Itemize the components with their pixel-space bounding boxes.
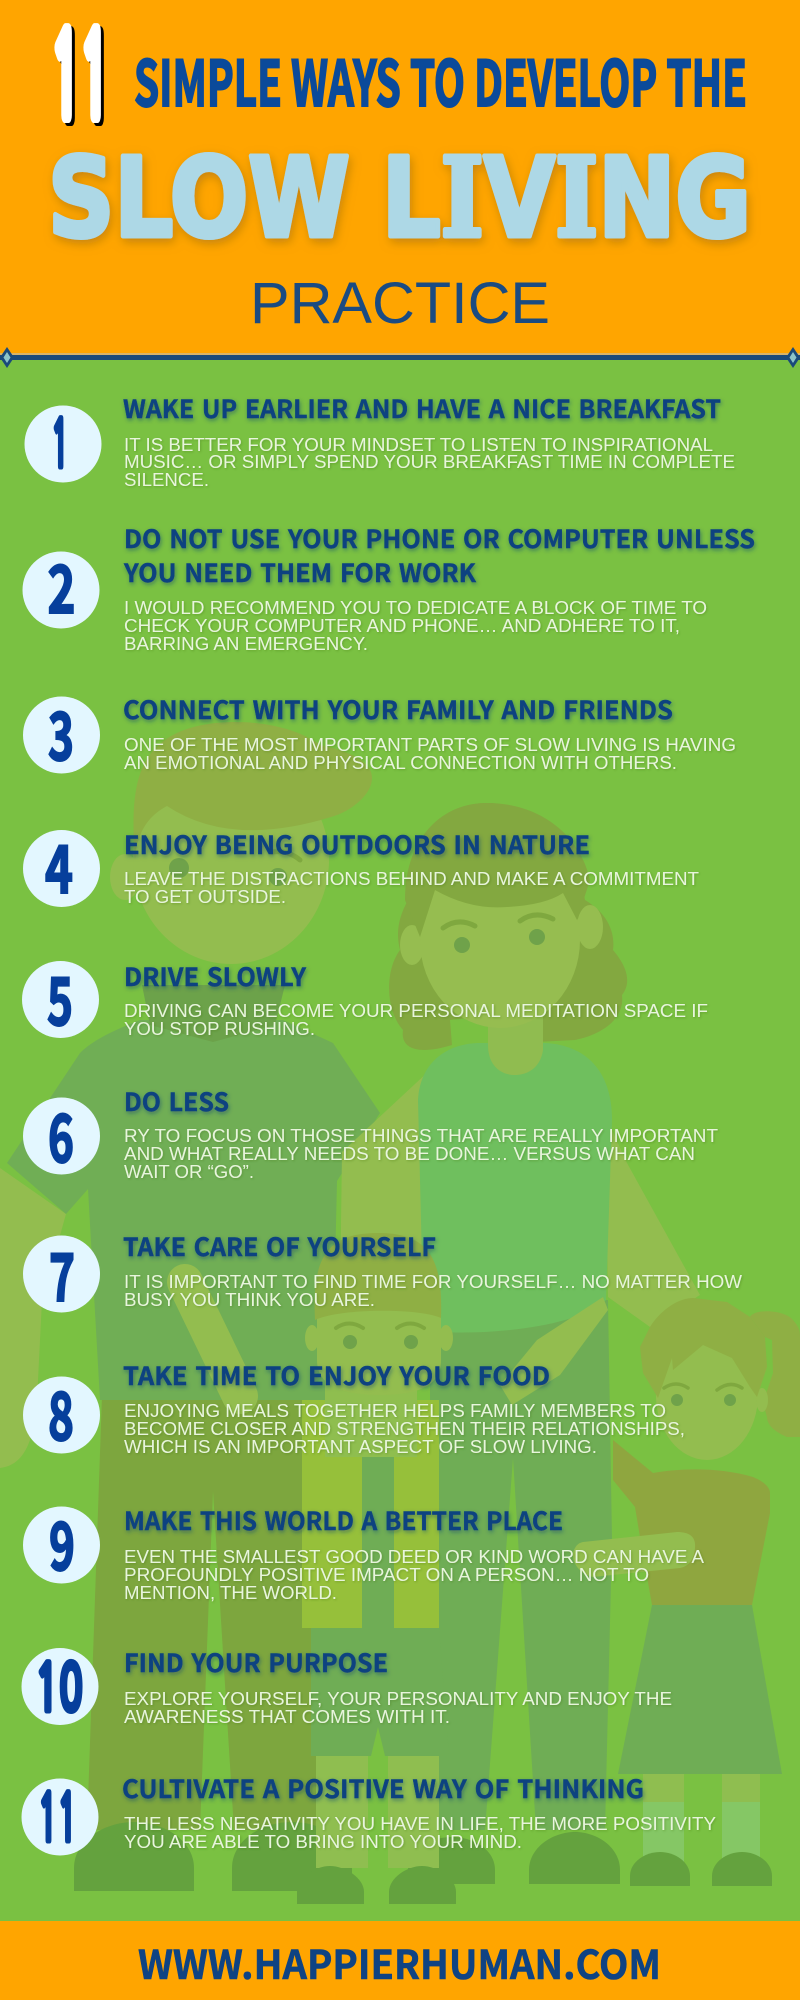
header background <box>0 0 800 358</box>
body 1: IT IS BETTER FOR YOUR MINDSET TO LISTEN TO INSPIRATIONAL <box>124 435 713 455</box>
number badge 6: 6 <box>48 1086 74 1182</box>
body 11 <box>124 1814 716 1852</box>
text: 11 <box>51 20 109 133</box>
item 2 <box>22 520 755 654</box>
body 8 <box>124 1401 685 1457</box>
number badge 2 <box>22 537 100 633</box>
heading 2: YOU NEED THEM FOR WORK <box>123 554 477 590</box>
body 8: ENJOYING MEALS TOGETHER HELPS FAMILY MEMBERS TO <box>124 1401 666 1421</box>
number badge 7 <box>23 1225 100 1321</box>
body 4: TO GET OUTSIDE. <box>124 887 286 907</box>
item 7 <box>23 1225 742 1321</box>
body 9: EVEN THE SMALLEST GOOD DEED OR KIND WORD CAN HAVE A <box>124 1547 704 1567</box>
heading 2 <box>123 520 755 590</box>
body 6: AND WHAT REALLY NEEDS TO BE DONE… VERSUS WHAT CAN <box>124 1144 695 1164</box>
body 11: THE LESS NEGATIVITY YOU HAVE IN LIFE, THE MORE POSITIVITY <box>124 1814 716 1834</box>
heading 9: MAKE THIS WORLD A BETTER PLACE <box>124 1502 563 1538</box>
body 7: BUSY YOU THINK YOU ARE. <box>124 1290 375 1310</box>
header divider with diamonds <box>0 347 800 368</box>
title: practice: PRACTICE <box>250 271 550 336</box>
heading 11: CULTIVATE A POSITIVE WAY OF THINKING <box>122 1770 644 1806</box>
body 1 <box>124 435 735 490</box>
figure: mother <box>340 803 700 1884</box>
heading 2: DO NOT USE YOUR PHONE OR COMPUTER UNLESS <box>124 520 755 556</box>
number badge 4: 4 <box>45 817 73 913</box>
number badge 8 <box>23 1364 100 1460</box>
figure: father <box>0 722 380 1891</box>
body 6: WAIT OR “GO”. <box>124 1162 254 1182</box>
body 4: LEAVE THE DISTRACTIONS BEHIND AND MAKE A COMMITMENT <box>124 869 699 889</box>
body 2: I WOULD RECOMMEND YOU TO DEDICATE A BLOCK OF TIME TO <box>124 598 707 618</box>
number badge 5: 5 <box>47 949 73 1045</box>
item 9 <box>23 1494 704 1603</box>
body 8: WHICH IS AN IMPORTANT ASPECT OF SLOW LIVING. <box>124 1437 597 1457</box>
body 10: AWARENESS THAT COMES WITH IT. <box>124 1707 450 1727</box>
number badge 6 <box>23 1086 100 1182</box>
footer band <box>0 1921 800 2000</box>
heading 6: DO LESS <box>124 1083 229 1119</box>
body 10: EXPLORE YOURSELF, YOUR PERSONALITY AND ENJOY THE <box>124 1689 672 1709</box>
number badge 9: 9 <box>49 1494 75 1590</box>
body 2: BARRING AN EMERGENCY. <box>124 634 368 654</box>
item 11 <box>22 1770 716 1856</box>
number badge 2: 2 <box>48 537 76 633</box>
text: 11 <box>54 23 112 136</box>
heading 10: FIND YOUR PURPOSE <box>124 1644 388 1680</box>
item 5 <box>22 949 708 1045</box>
green content background <box>0 358 800 1921</box>
heading 5: DRIVE SLOWLY <box>124 958 306 994</box>
number badge 1: 1 <box>51 412 69 477</box>
number badge 1 <box>24 406 102 482</box>
number badge 10 <box>22 1648 98 1725</box>
item 1 <box>24 390 735 490</box>
number badge 11: 11 <box>38 1786 77 1851</box>
body 8: BECOME CLOSER AND STRENGTHEN THEIR RELATIONSHIPS, <box>124 1419 685 1439</box>
number badge 3 <box>23 684 100 780</box>
figure: son <box>185 1233 608 1904</box>
body 1: SILENCE. <box>124 470 209 490</box>
body 1: MUSIC… OR SIMPLY SPEND YOUR BREAKFAST TIME IN COMPLETE <box>124 452 735 472</box>
body 10 <box>124 1689 672 1727</box>
body 7: IT IS IMPORTANT TO FIND TIME FOR YOURSELF… NO MATTER HOW <box>124 1272 742 1292</box>
body 7 <box>124 1272 742 1310</box>
body 4 <box>124 869 699 907</box>
body 3 <box>124 735 736 773</box>
heading 7: TAKE CARE OF YOURSELF <box>123 1228 436 1264</box>
body 9 <box>124 1547 704 1603</box>
footer website: WWW.HAPPIERHUMAN.COM <box>138 1933 661 1991</box>
heading 8: TAKE TIME TO ENJOY YOUR FOOD <box>123 1357 550 1393</box>
body 6: RY TO FOCUS ON THOSE THINGS THAT ARE REALLY IMPORTANT <box>124 1126 718 1146</box>
body 9: PROFOUNDLY POSITIVE IMPACT ON A PERSON… NOT TO <box>124 1565 649 1585</box>
body 3: AN EMOTIONAL AND PHYSICAL CONNECTION WITH OTHERS. <box>124 753 677 773</box>
body 9: MENTION, THE WORLD. <box>124 1583 337 1603</box>
number badge 7: 7 <box>49 1225 75 1321</box>
heading 4: ENJOY BEING OUTDOORS IN NATURE <box>124 826 590 862</box>
title: number 11 <box>51 20 112 136</box>
number badge 5 <box>22 949 99 1045</box>
body 5 <box>124 1001 708 1039</box>
item 6 <box>23 1083 718 1182</box>
body 11: YOU ARE ABLE TO BRING INTO YOUR MIND. <box>124 1832 522 1852</box>
background illustration: family <box>0 722 800 1904</box>
number badge 10: 10 <box>35 1656 83 1721</box>
number badge 3: 3 <box>48 684 74 780</box>
item 10 <box>22 1644 672 1727</box>
body 2: CHECK YOUR COMPUTER AND PHONE… AND ADHERE TO IT, <box>124 616 680 636</box>
item 3 <box>23 684 736 780</box>
number badge 8: 8 <box>48 1364 74 1460</box>
body 5: YOU STOP RUSHING. <box>124 1019 315 1039</box>
body 6 <box>124 1126 718 1182</box>
body 3: ONE OF THE MOST IMPORTANT PARTS OF SLOW LIVING IS HAVING <box>124 735 736 755</box>
figure: daughter <box>573 1298 800 1886</box>
body 5: DRIVING CAN BECOME YOUR PERSONAL MEDITATION SPACE IF <box>124 1001 708 1021</box>
heading 1: WAKE UP EARLIER AND HAVE A NICE BREAKFAST <box>123 390 721 426</box>
body 2 <box>124 598 707 654</box>
number badge 4 <box>23 817 100 913</box>
title: slow living: SLOW LIVING <box>48 133 751 262</box>
number badge 11 <box>22 1778 98 1856</box>
item 4 <box>23 817 699 913</box>
number badge 9 <box>23 1494 100 1590</box>
item 8 <box>23 1357 685 1460</box>
heading 3: CONNECT WITH YOUR FAMILY AND FRIENDS <box>123 691 673 727</box>
